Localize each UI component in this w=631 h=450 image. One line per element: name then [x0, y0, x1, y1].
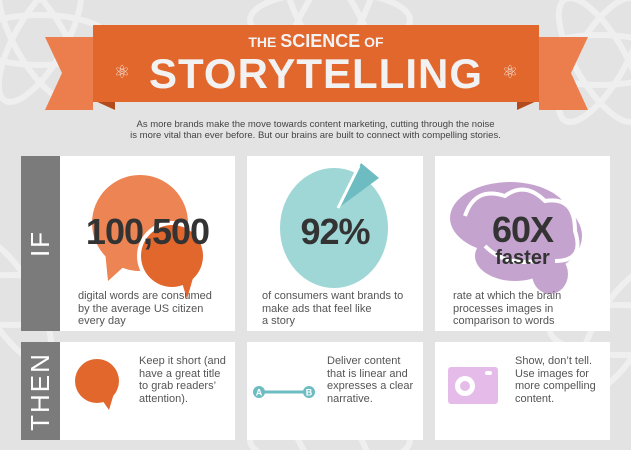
- panel: 92%: make ads that feel like: [262, 302, 371, 314]
- label: THEN: THEN: [25, 352, 55, 430]
- panel: 60X: comparison to words: [453, 315, 554, 327]
- panel: linear: Deliver content: [327, 355, 400, 367]
- panel: keep it short: to grab readers’: [139, 380, 216, 392]
- icon: A to B line: A: [256, 388, 263, 398]
- panel: 92%: a story: [262, 315, 295, 327]
- panel: linear: narrative.: [327, 392, 373, 404]
- icon: atom right: ⚛: [502, 62, 518, 82]
- pie chart: [280, 163, 388, 288]
- panel: keep it short: attention).: [139, 392, 188, 404]
- title text: STORYTELLING: [149, 50, 483, 97]
- panel: words: 100,500: [86, 211, 209, 252]
- panel: keep it short: Keep it short (and: [139, 355, 226, 367]
- panel: 60X: processes images in: [453, 302, 553, 314]
- panel: linear: that is linear and: [327, 368, 408, 380]
- panel: 60X: rate at which the brain: [453, 290, 561, 302]
- title text: THE SCIENCE OF: [248, 31, 384, 51]
- panel: words: [60, 156, 235, 331]
- panel: show don't tell: more compelling: [515, 380, 596, 392]
- panel: keep it short: have a great title: [139, 368, 220, 380]
- icon: atom left: ⚛: [114, 62, 130, 82]
- panel: linear: [247, 342, 423, 440]
- panel: keep it short: [60, 342, 235, 440]
- panel: words: every day: [78, 315, 126, 327]
- icon: A to B line: B: [306, 388, 313, 398]
- panel: 92%: [247, 156, 423, 331]
- panel: 92%: 92%: [300, 211, 370, 252]
- panel: words: digital words are consumed: [78, 290, 212, 302]
- subtitle: is more vital than ever before. But our brains are built to connect with compelling stories.: [130, 130, 501, 140]
- label: THEN: [21, 342, 60, 440]
- panel: 92%: of consumers want brands to: [262, 290, 403, 302]
- panel: linear: expresses a clear: [327, 380, 413, 392]
- icon: bubble: [75, 359, 119, 410]
- label: IF: IF: [25, 230, 55, 257]
- panel: words: by the average US citizen: [78, 302, 203, 314]
- icon: camera: [448, 367, 498, 404]
- label: IF: [21, 156, 60, 331]
- panel: show don't tell: [435, 342, 610, 440]
- panel: 60X: 60X: [492, 209, 553, 250]
- title banner: [45, 25, 588, 110]
- subtitle: As more brands make the move towards content marketing, cutting through the noise: [136, 119, 495, 130]
- icon: brain: [450, 182, 582, 294]
- panel: 60X: faster: [495, 247, 550, 269]
- icon: A to B line: [253, 386, 315, 398]
- panel: 60X: [435, 156, 610, 331]
- panel: show don't tell: Use images for: [515, 368, 589, 380]
- panel: show don't tell: Show, don’t tell.: [515, 355, 592, 367]
- subtitle: [130, 119, 501, 140]
- icon: speech bubbles: [92, 175, 203, 298]
- panel: show don't tell: content.: [515, 392, 554, 404]
